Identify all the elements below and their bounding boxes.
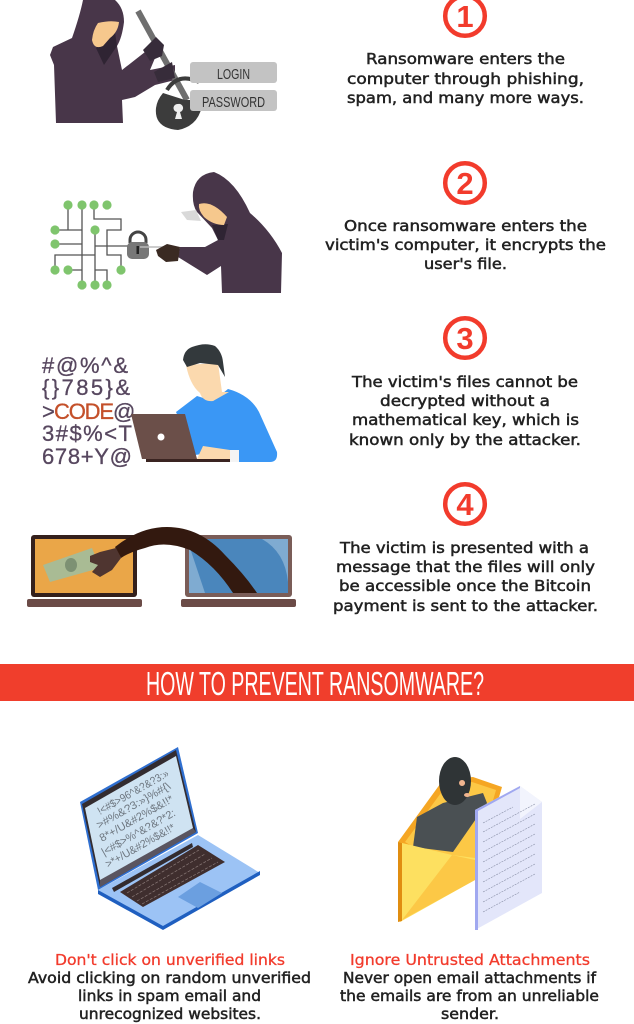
masked head xyxy=(439,757,471,805)
tip 2 body: sender. xyxy=(441,1005,499,1023)
tip 2 body: the emails are from an unreliable xyxy=(340,987,599,1005)
scrambled text xyxy=(95,768,178,871)
key xyxy=(140,246,165,248)
step 2 text xyxy=(325,217,606,273)
step 4 text: payment is sent to the attacker. xyxy=(333,597,598,615)
arm xyxy=(115,527,257,593)
left laptop xyxy=(31,535,137,597)
right screen highlights xyxy=(189,539,288,593)
illustration: coder at laptop xyxy=(42,344,277,469)
step 4 text xyxy=(333,539,598,615)
right screen xyxy=(189,539,288,593)
tip 1: unverified links xyxy=(28,951,311,1023)
code characters: #@%^& xyxy=(42,353,128,378)
illustration: hacker unlocking circuit xyxy=(50,172,282,293)
step 2 number badge: 2 xyxy=(456,166,474,201)
face xyxy=(92,21,119,47)
body xyxy=(413,793,487,852)
blindfold scrap xyxy=(181,210,201,221)
step 2 number badge xyxy=(445,163,485,203)
neck shadow xyxy=(212,224,228,240)
tip 2: untrusted attachments xyxy=(340,951,599,1023)
envelope back xyxy=(398,777,502,880)
code characters xyxy=(42,353,135,469)
hair xyxy=(183,344,225,377)
step 1 text: spam, and many more ways. xyxy=(347,89,584,107)
crowbar xyxy=(138,11,187,100)
neck shadow xyxy=(96,32,117,65)
illustration: laptop with scrambled text xyxy=(80,747,260,930)
password field xyxy=(190,90,277,111)
right base xyxy=(181,599,296,607)
envelope front right xyxy=(402,855,475,920)
code characters: CODE xyxy=(54,399,114,424)
envelope front left xyxy=(398,842,475,922)
password label: PASSWORD xyxy=(202,94,265,111)
lid outer xyxy=(80,747,198,890)
tip 1 body xyxy=(28,969,311,1023)
keyhole xyxy=(136,246,139,254)
small padlock xyxy=(130,232,146,243)
login label: LOGIN xyxy=(217,66,250,83)
login field xyxy=(190,62,277,83)
illustration: hacker breaking padlock xyxy=(50,0,277,130)
laptop logo xyxy=(158,434,164,440)
scrambled text: >#%&?3:»}%#{\ xyxy=(95,780,174,832)
keyboard keys xyxy=(127,850,218,904)
banknote xyxy=(43,548,100,582)
tip 2 body: Never open email attachments if xyxy=(343,969,597,987)
left base xyxy=(27,599,142,607)
illustration: hand stealing cash between laptops xyxy=(27,527,296,607)
tip 1 heading: Don't click on unverified links xyxy=(55,951,285,969)
code characters: 3#$%<T xyxy=(42,421,132,446)
banknote seal xyxy=(65,558,77,572)
step 3 text: known only by the attacker. xyxy=(349,431,581,449)
step 4 text: message that the files will only xyxy=(336,558,595,576)
screen xyxy=(85,756,193,880)
tip 2 heading: Ignore Untrusted Attachments xyxy=(350,951,590,969)
eye holes xyxy=(459,780,470,797)
document edge xyxy=(475,786,520,930)
step 1 text: Ransomware enters the xyxy=(366,50,565,68)
step 3 number badge: 3 xyxy=(456,321,474,356)
step 3 text: The victim's files cannot be xyxy=(351,373,578,391)
code characters: {}785}& xyxy=(42,375,130,400)
step 4 text: The victim is presented with a xyxy=(339,539,589,557)
hand xyxy=(90,548,121,577)
step 1 text xyxy=(347,50,584,107)
step 2 text: user's file. xyxy=(424,255,507,273)
step 2 text: Once ransomware enters the xyxy=(344,217,587,235)
glove xyxy=(156,244,180,262)
envelope left edge xyxy=(398,842,402,922)
scrambled text: 8*+/U&#2%$&!!* xyxy=(98,793,176,845)
circuit nodes xyxy=(50,200,126,290)
base front edge xyxy=(98,871,260,930)
keyboard xyxy=(120,845,225,907)
step 3 text: decrypted without a xyxy=(380,392,550,410)
document fold xyxy=(520,786,542,819)
scrambled text: |<#$>%^&?&?*2: xyxy=(100,807,178,859)
document lines xyxy=(483,804,535,912)
tip 1 body: links in spam email and xyxy=(78,987,261,1005)
hinge xyxy=(112,843,193,892)
code characters: > xyxy=(42,399,55,424)
document xyxy=(475,786,542,930)
illustration: masked man in envelope xyxy=(398,757,542,930)
tip 1 body: unrecognized websites. xyxy=(79,1005,261,1023)
lower bezel xyxy=(100,828,196,887)
trackpad xyxy=(178,882,222,908)
hooded figure xyxy=(178,172,282,293)
code characters: 678+Y@ xyxy=(42,444,132,469)
left screen xyxy=(35,539,133,593)
scrambled text: !<#$>96^&?&?3:» xyxy=(96,768,171,818)
code characters: @ xyxy=(113,399,135,424)
laptop base xyxy=(146,459,230,462)
face and neck xyxy=(186,363,229,401)
scrambled text: >*+/U&#2%$&!!* xyxy=(104,821,178,871)
step 3 text: mathematical key, which is xyxy=(352,411,579,429)
tip 2 body xyxy=(340,969,599,1023)
circuit traces xyxy=(55,205,128,285)
tip 1 body: Avoid clicking on random unverified xyxy=(28,969,311,987)
hand xyxy=(197,446,230,460)
hooded figure xyxy=(50,0,175,123)
cuff xyxy=(230,450,239,462)
keyhole xyxy=(173,104,183,119)
step 4 number badge: 4 xyxy=(456,487,474,522)
step 4 text: be accessible once the Bitcoin xyxy=(339,577,591,595)
face xyxy=(199,203,227,225)
lid bezel xyxy=(82,750,196,887)
shirt xyxy=(176,389,277,462)
right laptop xyxy=(185,535,292,597)
gloves xyxy=(143,37,175,82)
step 1 number badge: 1 xyxy=(456,0,474,34)
step 2 text: victim's computer, it encrypts the xyxy=(325,236,606,254)
padlock body xyxy=(127,242,149,259)
step 1 text: computer through phishing, xyxy=(347,70,584,88)
step 1 number badge xyxy=(445,0,485,36)
step 3 text xyxy=(349,373,581,449)
step 3 number badge xyxy=(445,318,485,358)
laptop base xyxy=(98,835,260,929)
laptop lid xyxy=(131,414,197,459)
envelope inner xyxy=(405,782,496,880)
padlock shackle xyxy=(167,78,199,90)
padlock xyxy=(156,90,203,130)
step 4 number badge xyxy=(445,484,485,524)
